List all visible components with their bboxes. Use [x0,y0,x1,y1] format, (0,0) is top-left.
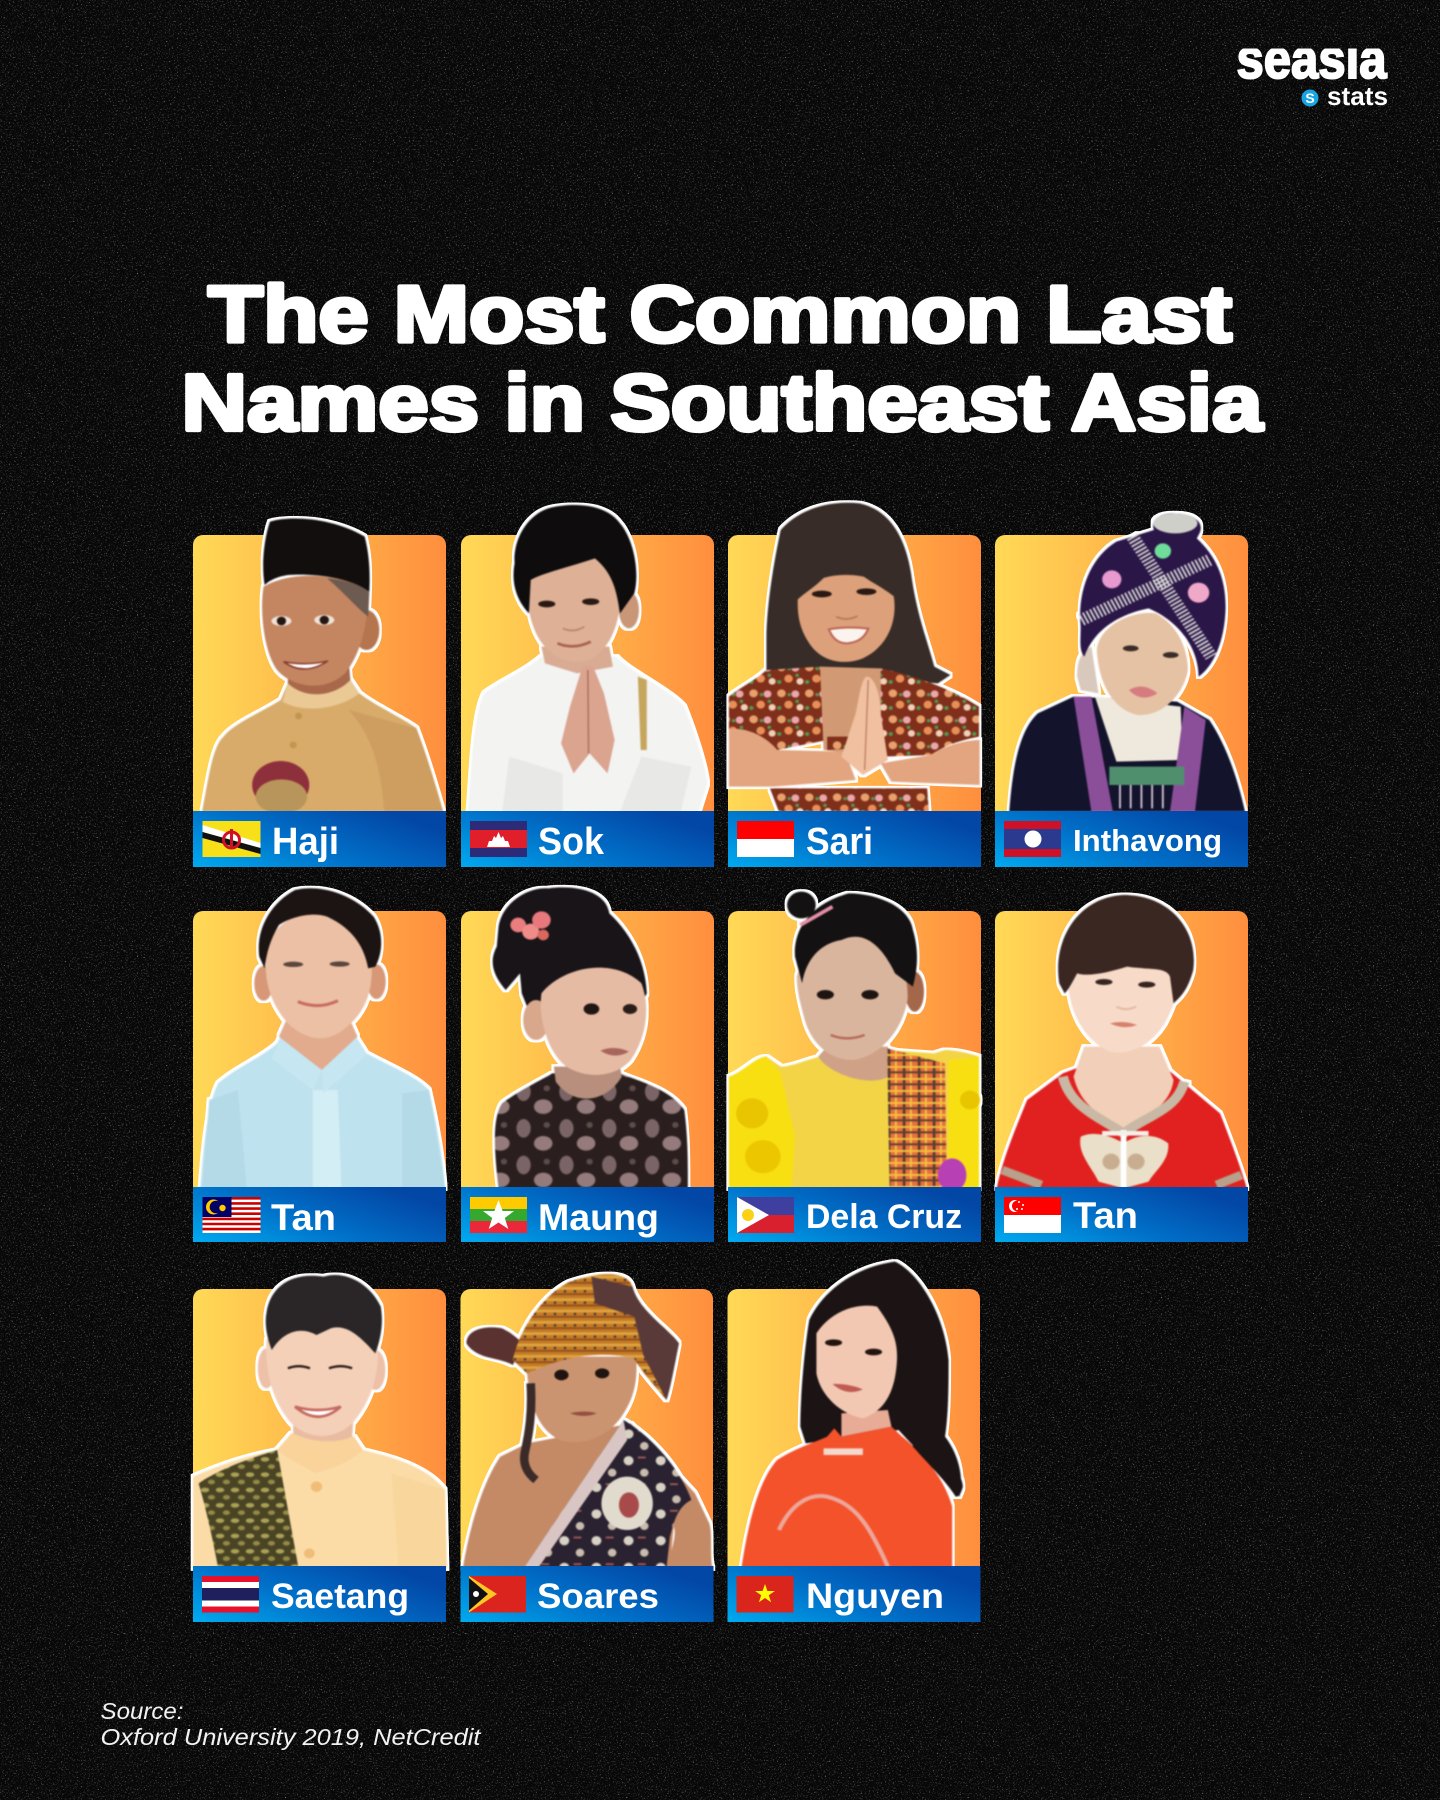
panel: Nguyen, Vietnam [728,1262,980,1622]
name banner [193,1187,446,1242]
portrait: boy with head wrap and ikat sash [463,1274,713,1568]
flag: Singapore [1004,1197,1061,1233]
source note: Oxford University 2019, NetCredit [100,1724,482,1750]
panel: Sok, Cambodia [461,505,714,867]
portrait: boy in black cap [202,518,443,814]
card background [728,535,981,811]
card background [995,535,1248,811]
name: Sok: Sok [538,821,605,863]
panel: Sari, Indonesia [728,503,981,867]
name: Haji: Haji [272,821,339,863]
name: Sari: Sari [806,821,873,863]
name banner [728,811,981,867]
flag: Indonesia [737,821,794,857]
card background [461,535,714,811]
panel: Tan, Malaysia [193,888,446,1242]
card background [728,1289,980,1566]
flag: Myanmar [470,1197,527,1233]
logo: seasia stats: stats [1327,81,1388,111]
source note [100,1698,482,1750]
card background [728,911,981,1187]
logo: seasia stats [1237,48,1388,106]
card background [193,911,446,1187]
name banner [728,1566,980,1622]
name: Maung: Maung [538,1197,659,1238]
panel: Maung, Myanmar [461,887,714,1242]
name banner [193,1566,446,1622]
flag: Philippines [737,1197,794,1233]
name banner [995,811,1248,867]
portrait: girl in red ao dai [741,1262,963,1568]
card background [995,911,1248,1187]
name: Tan: Tan [271,1197,336,1238]
portrait: boy in red shirt [997,895,1247,1188]
name banner [728,1187,981,1242]
card background [193,1289,446,1566]
title [182,270,1263,447]
name: Saetang: Saetang [271,1577,409,1616]
panel: Saetang, Thailand [193,1275,447,1622]
name: Soares: Soares [537,1577,659,1616]
name banner [193,811,446,867]
name: Nguyen: Nguyen [806,1577,944,1616]
flag: Vietnam [736,1576,794,1612]
card background [193,535,446,811]
portrait: girl with hair bun and flowers [493,887,688,1188]
logo: seasia stats: S [1305,90,1315,106]
name: Inthavong: Inthavong [1073,823,1222,858]
name: Dela Cruz: Dela Cruz [806,1198,962,1236]
flag: Laos [1004,821,1061,857]
panel: Haji, Brunei [193,518,446,867]
title: The Most Common Last [208,270,1232,358]
panel: Soares, Timor-Leste [460,1274,714,1622]
name: Tan: Tan [1073,1195,1138,1236]
name banner [995,1187,1248,1242]
logo: seasia stats: seasia [1236,27,1387,90]
name banner [461,811,714,867]
portrait: smiling girl in floral dress [729,503,980,812]
portrait: boy with Thai sash [193,1275,447,1568]
source note: Source: [100,1698,184,1724]
name banner [460,1566,714,1622]
flag: Cambodia [470,821,527,857]
portrait: boy in white shirt [468,505,707,812]
flag: Brunei [202,821,260,857]
flag: Malaysia [202,1197,260,1233]
card background [460,1289,713,1566]
portrait: girl in purple hat [1009,513,1245,812]
name banner [461,1187,714,1242]
title: Names in Southeast Asia [182,358,1263,447]
flag: Timor-Leste [469,1576,526,1612]
panel: Inthavong, Laos [995,513,1248,867]
portrait: boy in light blue shirt [200,888,445,1188]
flag: Thailand [202,1576,259,1612]
portrait: girl in yellow dress with plaid sash [729,892,980,1192]
panel: Dela Cruz, Philippines [728,892,981,1242]
panel: Tan, Singapore [995,895,1248,1242]
card background [461,911,714,1187]
